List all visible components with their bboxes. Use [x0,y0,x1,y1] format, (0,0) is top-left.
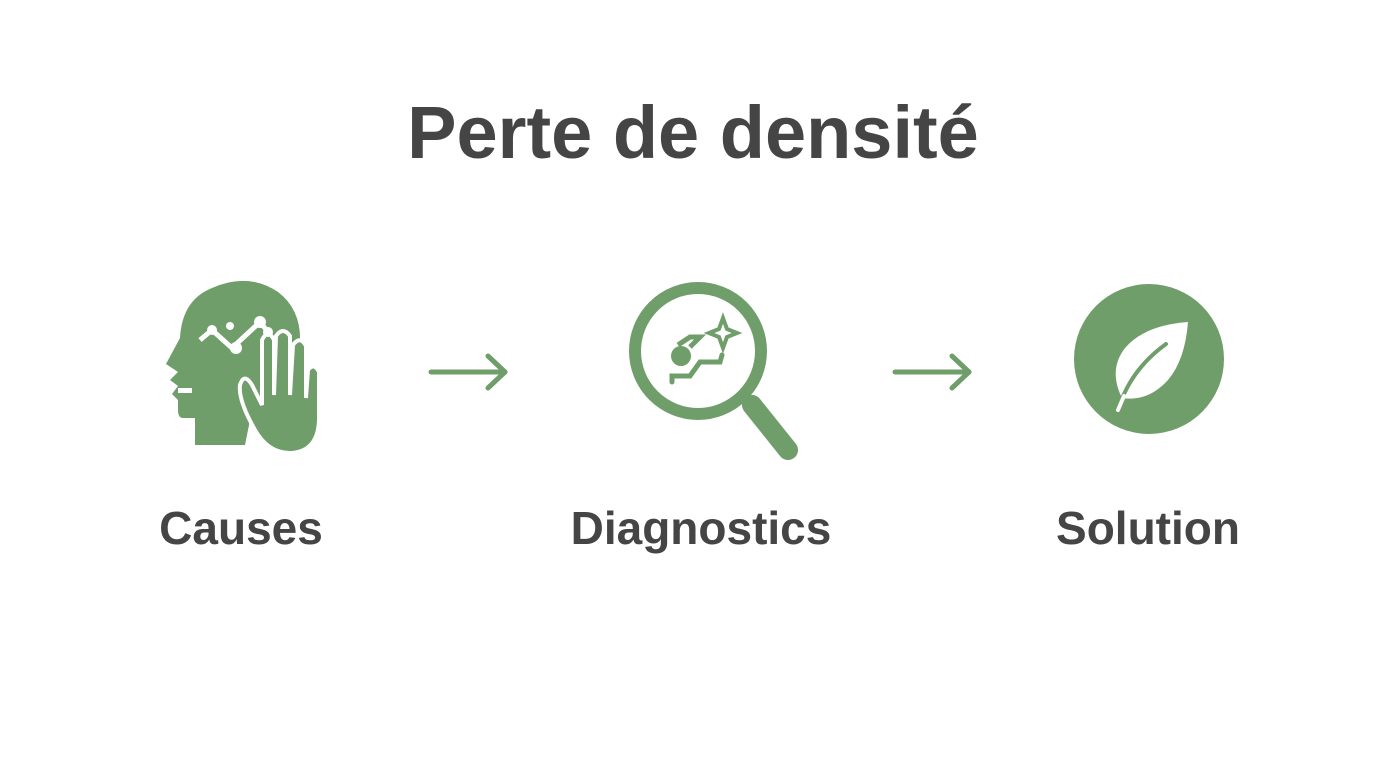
label: diagnostics: Diagnostics [571,502,831,554]
label: causes: Causes [159,502,323,554]
icon: magnifier [635,288,788,450]
label: solution: Solution [1056,502,1240,554]
arrow 1 [431,356,505,388]
icon: head with hand [166,281,319,453]
title: Perte de densité [407,91,979,174]
arrow 2 [895,356,969,388]
icon: leaf [1074,284,1224,434]
